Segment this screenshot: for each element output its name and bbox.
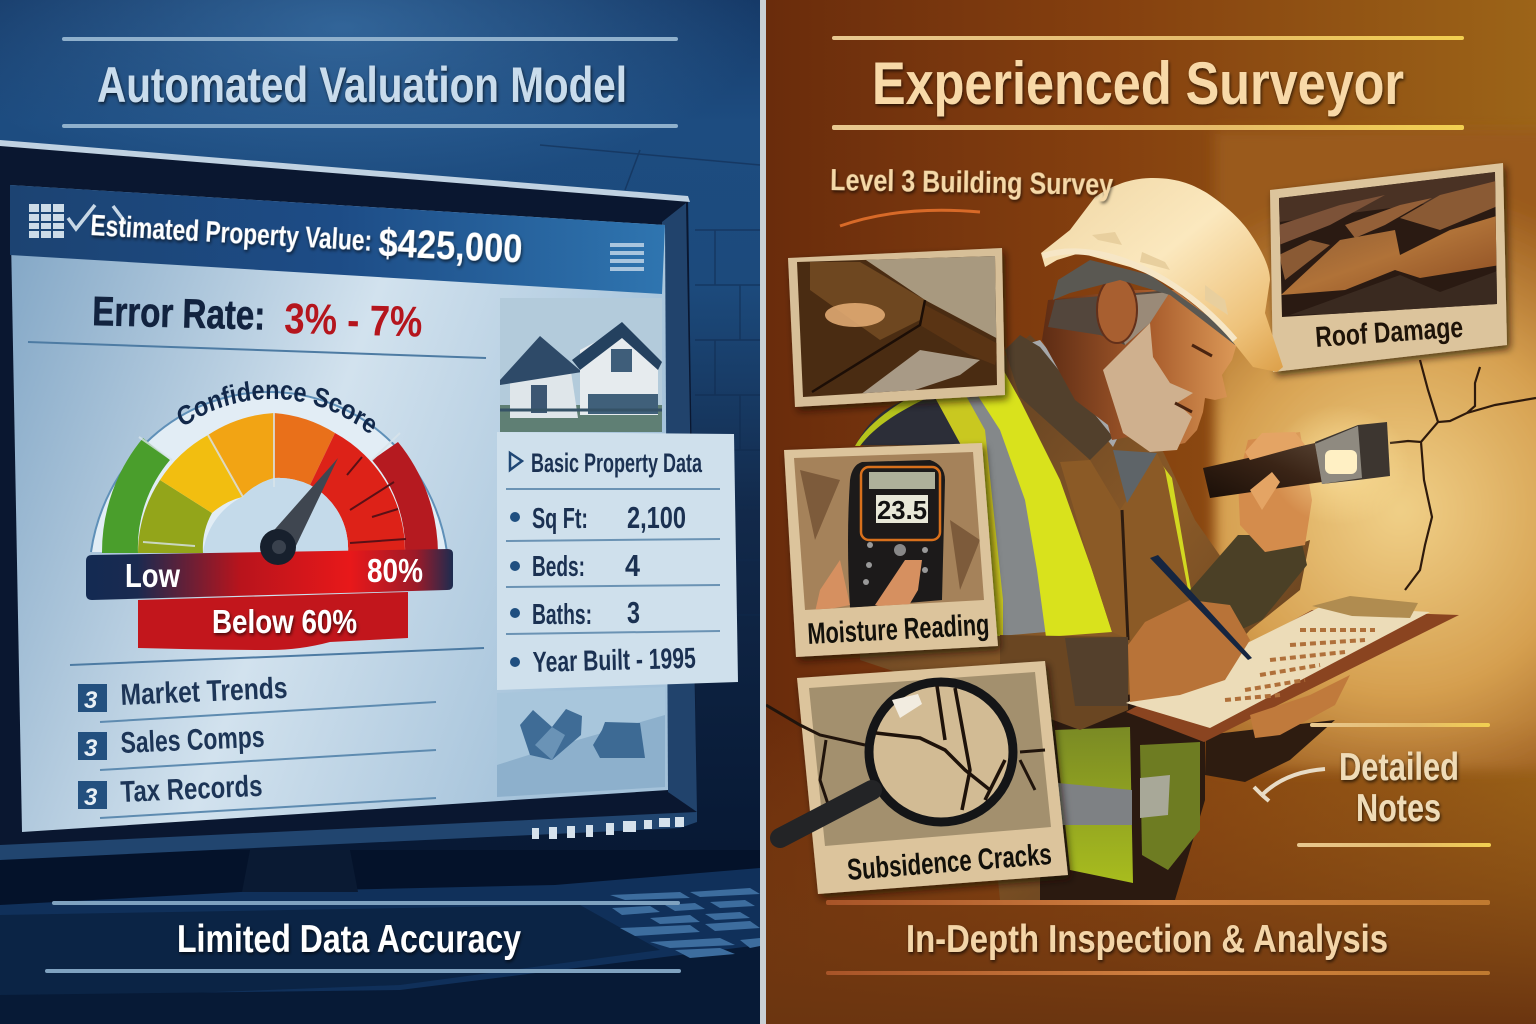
title rule bottom	[832, 125, 1464, 130]
footer rule top	[52, 901, 680, 905]
square feet row	[510, 506, 685, 534]
market trends: Market Trends	[120, 672, 288, 712]
error rate label: Error Rate:	[92, 288, 266, 339]
icon: check mark	[68, 205, 125, 229]
beds row	[510, 555, 640, 576]
hard hat	[1041, 178, 1283, 372]
confidence score gauge	[86, 381, 453, 650]
dark lower torso	[1040, 690, 1205, 900]
year built row: Year Built - 1995	[532, 643, 696, 679]
panel heading: Basic Property Data	[531, 448, 703, 478]
low to 80 percent bar: Low	[125, 557, 180, 594]
value: $425,000: $425,000	[378, 221, 523, 271]
moisture reading caption: Moisture Reading	[807, 609, 990, 651]
sales comps	[78, 728, 264, 760]
title rule top	[62, 37, 678, 41]
roof damage caption: Roof Damage	[1314, 312, 1464, 354]
below 60 percent banner	[138, 592, 408, 650]
magnifying glass	[780, 682, 1013, 838]
square feet row: Sq Ft:	[532, 503, 588, 535]
estimated property value: Estimated Property Value:	[90, 209, 373, 258]
title rule top	[832, 36, 1464, 40]
shoulder	[856, 395, 980, 445]
hand holding meter	[815, 560, 922, 612]
data source list	[78, 672, 436, 818]
sales comps: 3	[84, 735, 98, 762]
beds row: 4	[625, 548, 641, 583]
title: Automated Valuation Model: Automated Valuation Model	[97, 57, 627, 113]
hair	[1048, 290, 1170, 345]
writing arm sleeve	[1000, 635, 1128, 730]
title: Experienced Surveyor: Experienced Surveyor	[872, 50, 1404, 117]
gauge needle	[260, 458, 338, 565]
ear	[1097, 277, 1137, 343]
beard	[1103, 323, 1193, 452]
head and neck	[1042, 290, 1238, 450]
panel: automated valuation model	[0, 0, 760, 1024]
crack lines	[766, 705, 1045, 810]
moisture meter	[848, 460, 945, 608]
footer: limited data accuracy: Limited Data Accuracy	[177, 918, 521, 961]
error rate value: 3% - 7%	[284, 295, 423, 347]
baths row: 3	[627, 595, 640, 630]
shirt collar and placket	[1030, 340, 1118, 447]
icon: calendar grid	[29, 204, 64, 238]
year built row	[510, 648, 696, 672]
helmet strap	[1053, 260, 1242, 345]
mouth and eye	[1175, 345, 1212, 412]
jacket front	[1060, 453, 1195, 640]
basic property data panel	[497, 432, 738, 690]
confidence score curved text: Confidence Score	[178, 381, 376, 433]
detailed notes callout	[1254, 723, 1491, 847]
photo: structural damage	[788, 248, 1005, 407]
jacket body	[860, 335, 1310, 900]
desk, monitor stand and keyboard	[0, 850, 760, 1024]
supporting arm sleeve	[1205, 720, 1335, 782]
clipboard	[1126, 596, 1459, 742]
screen header bar	[10, 185, 665, 294]
surveyor figure	[855, 178, 1459, 900]
thumbnail with icons	[497, 709, 665, 797]
below 60 percent banner: Below 60%	[212, 603, 357, 640]
tax records	[78, 774, 262, 809]
panel heading	[510, 448, 703, 478]
house photo	[500, 298, 662, 432]
pen	[1150, 555, 1252, 660]
flashlight hand	[1238, 432, 1312, 552]
market trends	[78, 676, 287, 712]
low to 80 percent bar	[86, 549, 453, 600]
detailed notes callout: Notes	[1356, 787, 1441, 830]
jacket collar	[1005, 335, 1113, 460]
photo: moisture reading	[784, 443, 998, 657]
baths row: Baths:	[532, 599, 592, 631]
status icons	[532, 817, 684, 839]
flashlight fingers	[1245, 432, 1305, 510]
footer rule top	[826, 900, 1490, 905]
footer rule bottom	[826, 971, 1490, 975]
level 3 building survey label: Level 3 Building Survey	[830, 162, 1114, 202]
arrow to notes	[1254, 769, 1325, 801]
tax records: Tax Records	[120, 770, 263, 809]
tax records: 3	[84, 784, 98, 811]
wall cracks	[1390, 360, 1536, 590]
supporting hand	[1250, 675, 1350, 738]
baths row	[510, 602, 640, 624]
flashlight arm sleeve	[1190, 535, 1307, 640]
beds row: Beds:	[532, 551, 585, 583]
detailed notes callout: Detailed	[1339, 746, 1459, 789]
market trends: 3	[84, 687, 98, 714]
low to 80 percent bar: 80%	[367, 552, 423, 589]
photo: roof damage	[1270, 163, 1507, 372]
icon: menu lines	[610, 245, 644, 269]
level 3 building survey label	[830, 162, 1114, 226]
title rule bottom	[62, 124, 678, 128]
high-vis vest	[855, 355, 1200, 883]
meter reading: 23.5	[877, 495, 927, 525]
panel: experienced surveyor	[766, 0, 1536, 1024]
footer: in-depth inspection and analysis: In-Depth Inspection & Analysis	[906, 918, 1388, 961]
flashlight	[1203, 405, 1410, 525]
panel divider	[760, 0, 766, 1024]
square feet row: 2,100	[627, 500, 686, 535]
footer rule bottom	[45, 969, 681, 973]
sales comps: Sales Comps	[120, 721, 265, 760]
monitor	[0, 140, 738, 860]
subsidence cracks caption: Subsidence Cracks	[846, 838, 1053, 887]
writing hand	[1128, 600, 1250, 702]
photo: subsidence cracks	[766, 661, 1068, 894]
